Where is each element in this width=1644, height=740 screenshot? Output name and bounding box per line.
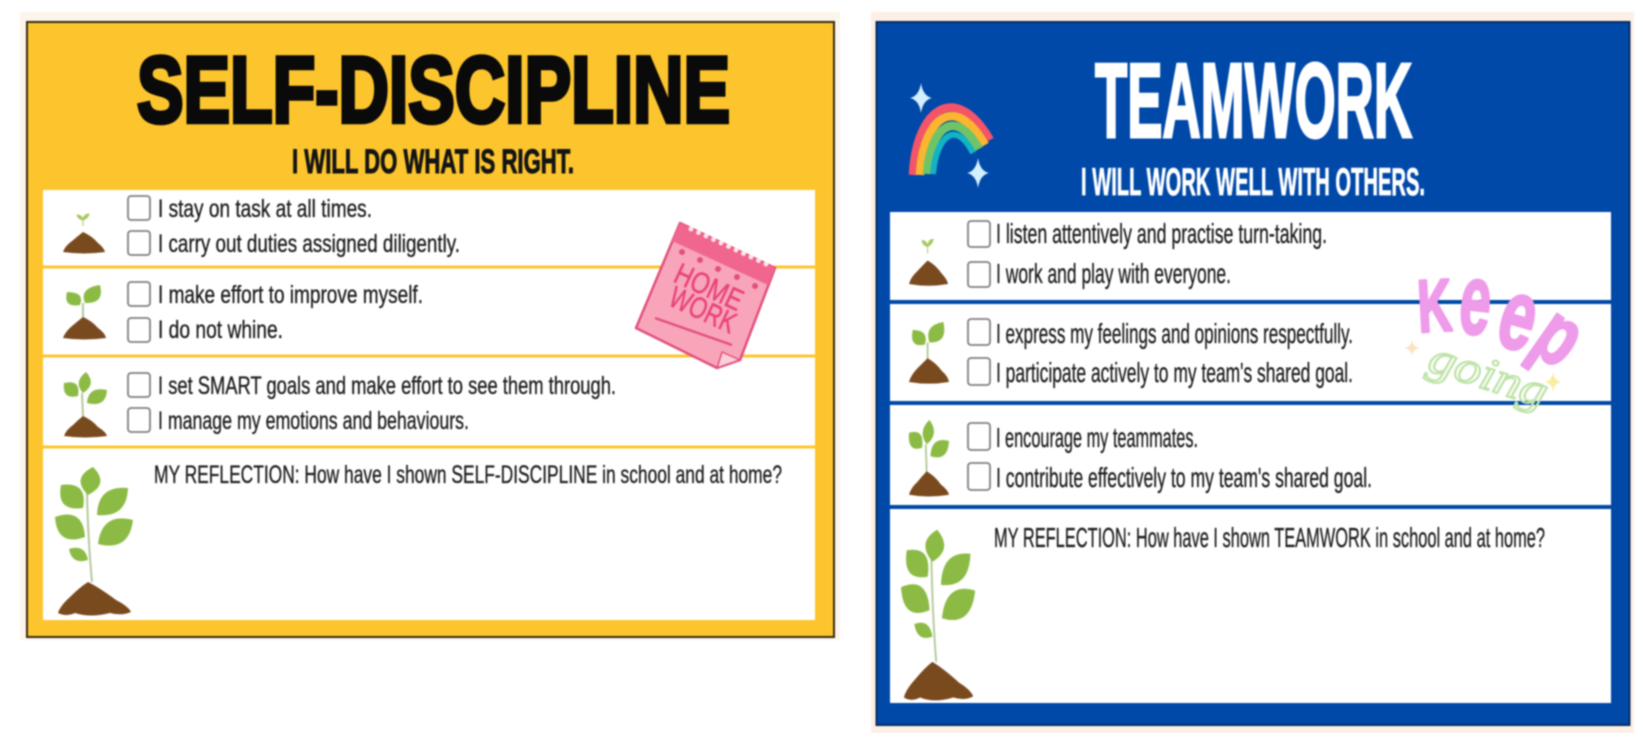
panel: self-discipline: [20, 12, 840, 640]
checklist row 3: I contribute effectively to my team's shared goal.: [996, 462, 1372, 493]
sticker: homework calendar: HOME: [669, 257, 748, 318]
checklist row 1: I listen attentively and practise turn-taking.: [996, 218, 1327, 249]
title: self-discipline: SELF-DISCIPLINE: [137, 37, 730, 142]
checklist row 2: I do not whine.: [158, 316, 283, 344]
icon: full grown plant: [55, 467, 133, 616]
sticker: keep going: [1404, 242, 1603, 417]
icon: seedling stage 3: [64, 372, 107, 438]
checklist row 1: I work and play with everyone.: [996, 258, 1231, 289]
sticker: homework calendar: [636, 223, 775, 368]
checklist row 1: I stay on task at all times.: [158, 195, 372, 223]
icon: seedling stage 1: [909, 239, 948, 286]
subtitle: I will do what is right: I WILL DO WHAT IS RIGHT.: [292, 143, 574, 181]
reflection prompt: MY REFLECTION: How have I shown SELF-DISCIPLINE in school and at home?: [154, 461, 782, 489]
checklist row 3: I set SMART goals and make effort to see them through.: [158, 372, 616, 400]
checklist row 3: I manage my emotions and behaviours.: [158, 407, 469, 435]
checklist row 3: I encourage my teammates.: [996, 422, 1198, 453]
icon: seedling stage 3: [909, 420, 949, 496]
panel: teamwork: [871, 12, 1634, 733]
checklist row 2: I make effort to improve myself.: [158, 281, 423, 309]
checklist row 1: [128, 195, 460, 258]
checklist row 3: [128, 372, 616, 435]
checklist row 2: [968, 318, 1353, 388]
sticker: homework calendar: WORK: [664, 281, 741, 340]
sticker: keep going: e: [1455, 242, 1497, 357]
sticker: keep going: K: [1415, 263, 1454, 348]
checklist row 2: I express my feelings and opinions respectfully.: [996, 318, 1353, 349]
sticker: keep going: going: [1423, 331, 1555, 417]
icon: seedling stage 2: [63, 285, 106, 340]
sticker: keep going: e: [1487, 256, 1551, 374]
sticker: keep going: p: [1518, 286, 1603, 385]
checklist row 2: I participate actively to my team's shared goal.: [996, 357, 1353, 388]
icon: rainbow with sparkles: [910, 83, 990, 188]
checklist row 1: I carry out duties assigned diligently.: [158, 230, 460, 258]
icon: seedling stage 2: [909, 322, 949, 384]
icon: full grown plant: [901, 530, 975, 700]
checklist row 3: [968, 422, 1372, 493]
icon: seedling stage 1: [63, 214, 105, 254]
checklist row 1: [968, 218, 1327, 289]
checklist row 2: [128, 281, 423, 344]
